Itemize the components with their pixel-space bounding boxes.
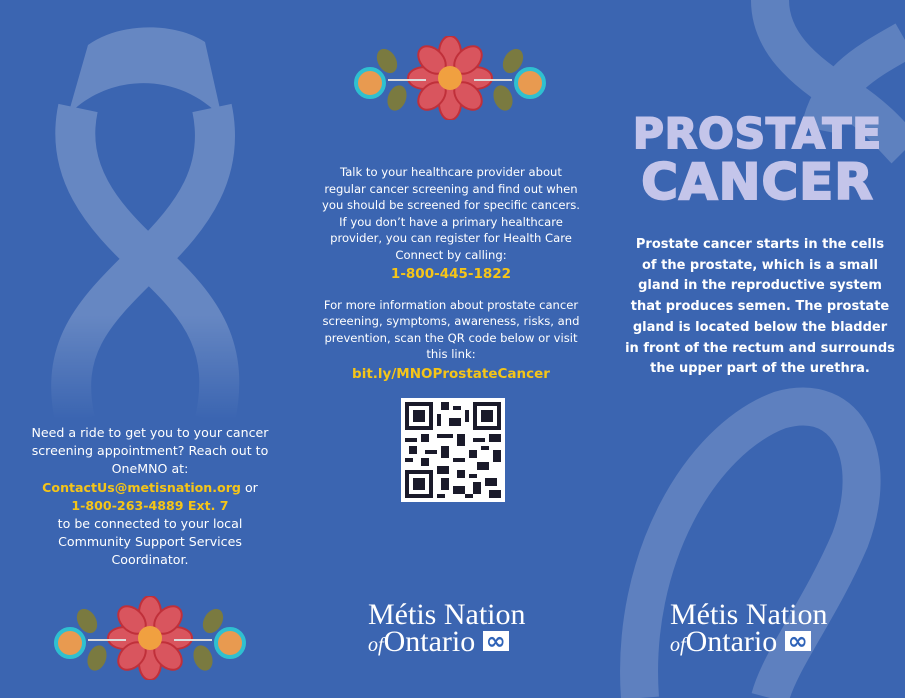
right description [625, 237, 895, 376]
left text block: Community Support Services [58, 534, 242, 549]
logo right: ofOntario [670, 625, 777, 658]
left text block: screening appointment? Reach out to [32, 443, 268, 458]
left text block: to be connected to your local [58, 516, 242, 531]
middle text block: this link: [426, 347, 476, 361]
middle text block: you should be screened for specific cancers. [322, 198, 580, 212]
left text block [32, 425, 268, 567]
right description: Prostate cancer starts in the cells [636, 237, 884, 252]
right description: of the prostate, which is a small [642, 258, 878, 273]
flower top [354, 36, 546, 120]
flower bottom left [54, 596, 246, 680]
right description: the upper part of the urethra. [650, 361, 870, 376]
middle text block: screening, symptoms, awareness, risks, and [322, 314, 579, 328]
logo middle: Métis Nation [368, 598, 526, 631]
middle text block: For more information about prostate cancer [324, 298, 578, 312]
left text block: OneMNO at: [112, 461, 188, 476]
right description: gland in the reproductive system [638, 278, 882, 293]
left text block: 1-800-263-4889 Ext. 7 [71, 498, 229, 513]
logo middle: ∞ [486, 627, 506, 655]
middle text block: provider, you can register for Health Care [330, 231, 572, 245]
middle text block: If you don’t have a primary healthcare [339, 215, 563, 229]
logo right: Métis Nation [670, 598, 828, 631]
middle text block: bit.ly/MNOProstateCancer [352, 366, 550, 382]
logo right [670, 598, 828, 658]
middle text block: Talk to your healthcare provider about [340, 165, 562, 179]
logo middle: ofOntario [368, 625, 475, 658]
right description: gland is located below the bladder [633, 320, 887, 335]
left text block: Need a ride to get you to your cancer [32, 425, 268, 440]
right description: that produces semen. The prostate [631, 299, 889, 314]
middle text block: Connect by calling: [395, 248, 507, 262]
logo middle [368, 598, 526, 658]
title: PROSTATE [633, 109, 882, 158]
middle text block: prevention, scan the QR code below or visit [324, 331, 578, 345]
middle text block: 1-800-445-1822 [391, 266, 511, 282]
QR code [401, 398, 505, 502]
left text block: ContactUs@metisnation.org or [42, 480, 258, 495]
title [633, 109, 882, 211]
logo right: ∞ [788, 627, 808, 655]
left text block: Coordinator. [111, 552, 189, 567]
middle text block: regular cancer screening and find out when [324, 182, 578, 196]
middle text block [322, 165, 580, 382]
right description: in front of the rectum and surrounds [625, 341, 895, 356]
title: CANCER [641, 153, 874, 211]
